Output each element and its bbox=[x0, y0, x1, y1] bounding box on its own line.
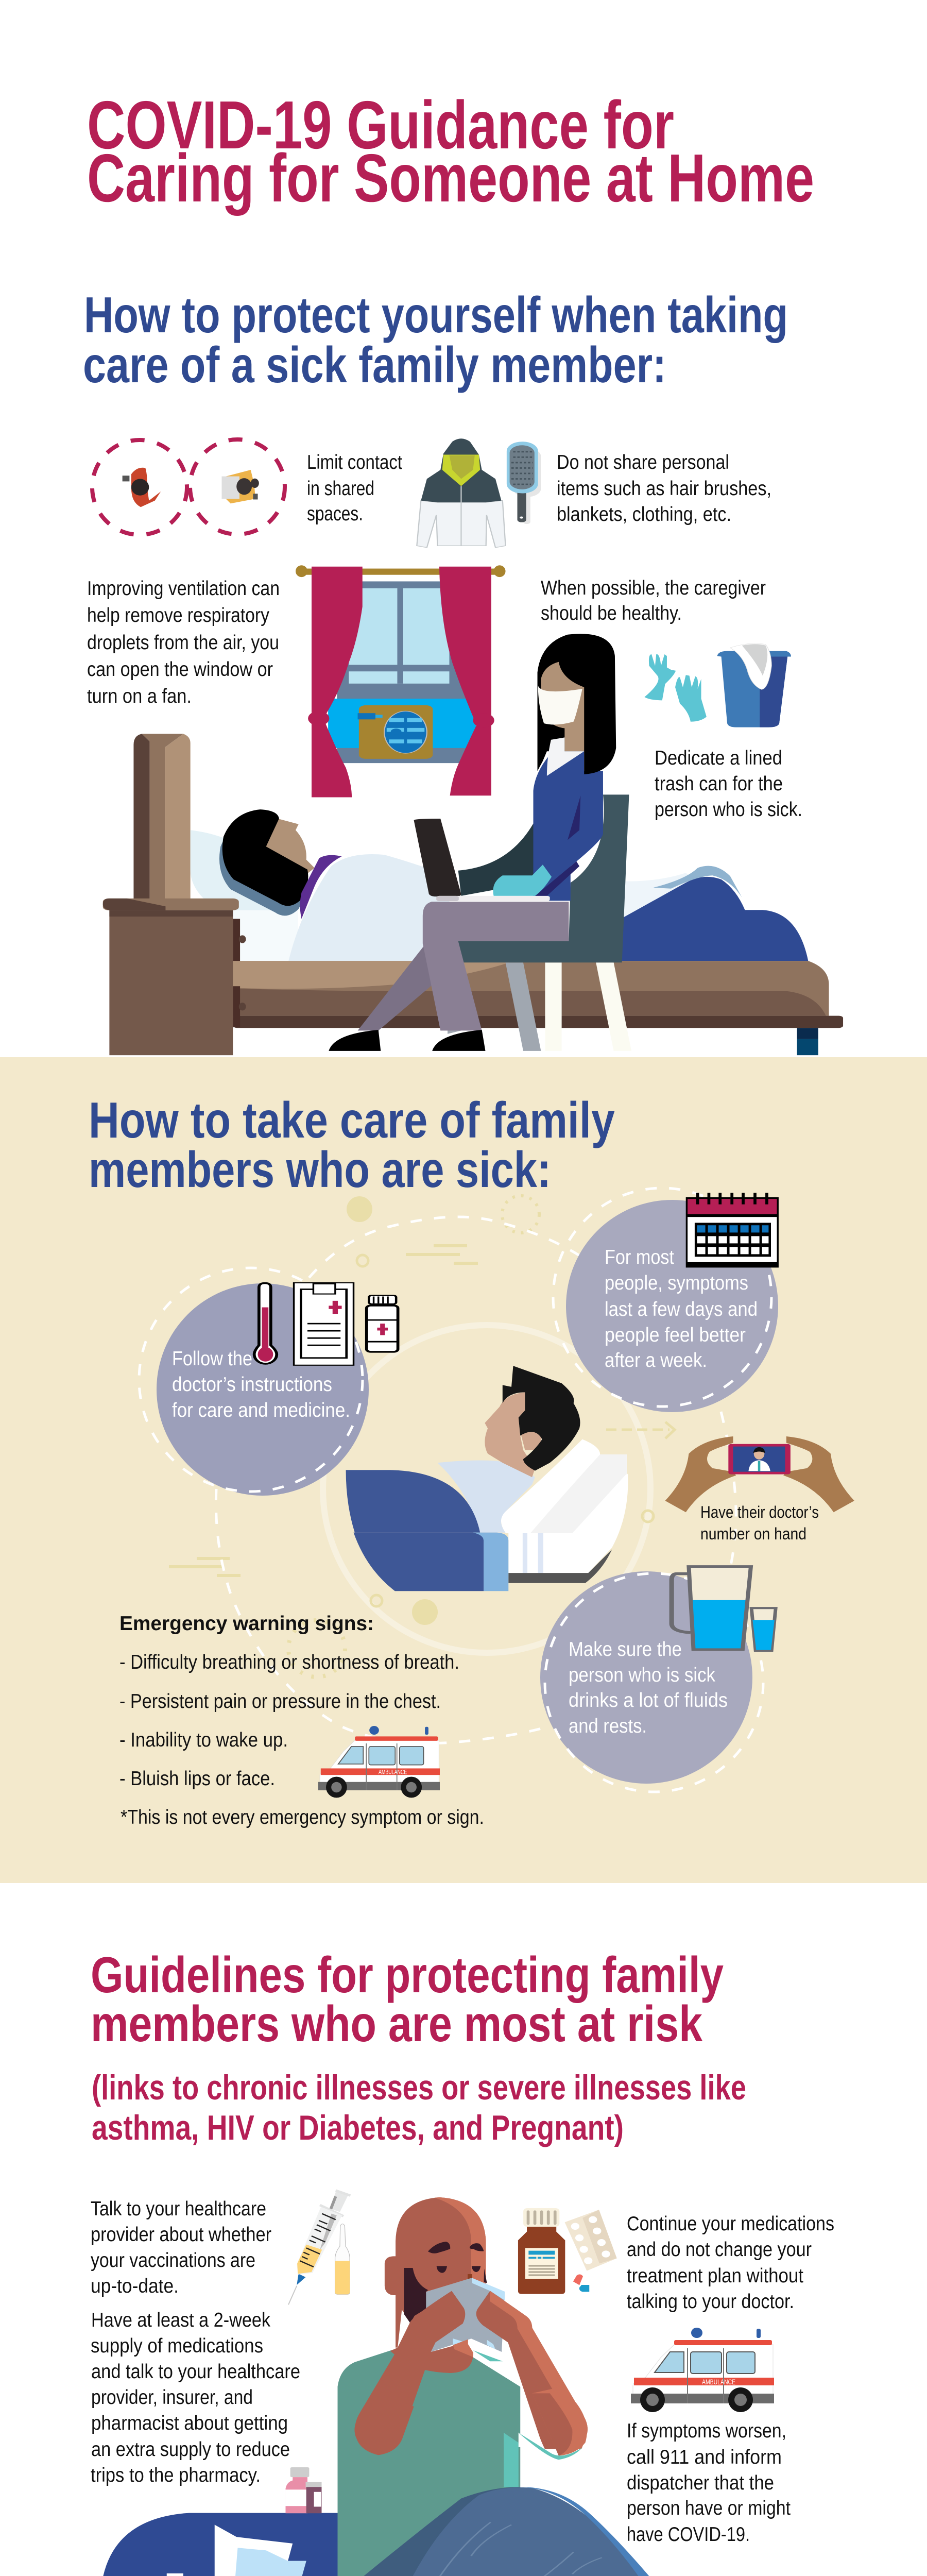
text: dedicate trash can: Dedicate a lined bbox=[655, 747, 782, 769]
text: emergency warning signs: - Difficulty breathing or shortness of breath. bbox=[119, 1651, 459, 1673]
panel: take care of family bbox=[0, 1057, 927, 1883]
text: talk to healthcare provider: up-to-date. bbox=[91, 2275, 179, 2297]
text: improving ventilation: can open the window or bbox=[87, 658, 273, 681]
subheading: chronic illnesses: (links to chronic illnesses or severe illnesses like bbox=[92, 2068, 746, 2107]
text: dedicate trash can bbox=[655, 747, 802, 821]
text: talk to healthcare provider: your vaccinations are bbox=[91, 2249, 255, 2272]
text: talk to healthcare provider: Talk to your healthcare bbox=[91, 2198, 266, 2220]
text: follow the doctor's instructions: doctor’s instructions bbox=[172, 1374, 332, 1396]
illustration: sick man resting in bed bbox=[346, 1366, 628, 1591]
text: make sure: person who is sick bbox=[569, 1664, 715, 1686]
text: 2-week supply: and talk to your healthcare bbox=[91, 2361, 300, 2383]
text: if symptoms worsen: person have or might bbox=[627, 2497, 791, 2519]
text: talk to healthcare provider: provider about whether bbox=[91, 2224, 271, 2246]
heading: take care: members who are sick: bbox=[89, 1141, 551, 1198]
heading: guidelines at risk bbox=[91, 1946, 724, 2052]
icon: lined trash can bbox=[717, 643, 791, 727]
callout: symptoms last a few days bbox=[553, 1188, 778, 1412]
icon: test tube bbox=[167, 2573, 183, 2576]
text: emergency warning signs bbox=[119, 1613, 484, 1828]
text: 2-week supply: Have at least a 2-week bbox=[91, 2309, 270, 2331]
illustration: man blowing nose bbox=[100, 2197, 729, 2576]
text: 2-week supply: supply of medications bbox=[91, 2335, 263, 2357]
text: continue medications: and do not change your bbox=[627, 2239, 812, 2261]
icon: ambulance: AMBULANCE bbox=[379, 1768, 407, 1775]
text: do not share: blankets, clothing, etc. bbox=[557, 503, 731, 526]
text: limit contact: spaces. bbox=[307, 503, 363, 525]
text: caregiver healthy: When possible, the caregiver bbox=[541, 577, 766, 599]
heading: take care bbox=[89, 1092, 615, 1198]
heading: protect yourself: care of a sick family member: bbox=[83, 336, 666, 393]
heading: take care: How to take care of family bbox=[89, 1092, 615, 1148]
text: emergency warning signs: - Bluish lips or face. bbox=[119, 1768, 275, 1790]
icon: gloves bbox=[644, 654, 707, 722]
icon: phone held in hands bbox=[665, 1436, 854, 1512]
text: continue medications: Continue your medications bbox=[627, 2213, 834, 2235]
text: follow the doctor's instructions: for care and medicine. bbox=[172, 1399, 350, 1421]
text: emergency warning signs: *This is not every emergency symptom or sign. bbox=[121, 1806, 484, 1828]
text: make sure: and rests. bbox=[569, 1715, 647, 1737]
text: limit contact: in shared bbox=[307, 478, 374, 500]
text: 2-week supply: trips to the pharmacy. bbox=[91, 2464, 261, 2486]
illustration: patient in bed bbox=[133, 734, 843, 1055]
icon: ambulance bbox=[318, 1726, 440, 1798]
text: improving ventilation: help remove respiratory bbox=[87, 604, 269, 626]
heading: guidelines at risk: Guidelines for protecting family bbox=[91, 1946, 724, 2003]
icon: tissue box bbox=[209, 2525, 311, 2576]
text: improving ventilation: droplets from the air, you bbox=[87, 632, 279, 654]
title: COVID-19 Guidance for bbox=[87, 87, 674, 163]
dashed connecting path bbox=[216, 1217, 736, 1743]
text: doctor's number bbox=[700, 1503, 819, 1543]
text: dedicate trash can: person who is sick. bbox=[655, 799, 802, 821]
subheading: chronic illnesses: asthma, HIV or Diabetes, and Pregnant) bbox=[92, 2108, 624, 2147]
text: do not share: Do not share personal bbox=[557, 451, 729, 473]
text: make sure: drinks a lot of fluids bbox=[569, 1689, 728, 1711]
text: if symptoms worsen bbox=[627, 2420, 791, 2546]
text: 2-week supply: pharmacist about getting bbox=[91, 2412, 288, 2434]
icon: calendar bbox=[686, 1193, 779, 1267]
text: emergency warning signs: - Inability to wake up. bbox=[119, 1729, 288, 1751]
decorative background ring and shapes bbox=[169, 1196, 675, 1677]
text: for most people: people feel better bbox=[605, 1324, 746, 1346]
subheading: chronic illnesses bbox=[92, 2068, 746, 2147]
text: caregiver healthy: should be healthy. bbox=[541, 602, 682, 624]
text: follow the doctor's instructions: Follow the bbox=[172, 1348, 252, 1370]
icon: two people distanced in dashed circles bbox=[92, 439, 285, 535]
text: do not share: items such as hair brushes, bbox=[557, 478, 771, 500]
text: caregiver healthy bbox=[541, 577, 766, 624]
text: for most people: For most bbox=[605, 1246, 674, 1268]
icon: ambulance large: AMBULANCE bbox=[702, 2378, 735, 2386]
icon: ambulance large bbox=[631, 2328, 774, 2412]
text: continue medications bbox=[627, 2213, 834, 2313]
icon: pill bottles on chair bbox=[285, 2467, 322, 2513]
text: make sure bbox=[569, 1638, 728, 1737]
text: improving ventilation bbox=[87, 578, 280, 707]
title bbox=[87, 87, 814, 216]
text: limit contact bbox=[307, 451, 402, 525]
illustration: caregiver on chair with laptop bbox=[329, 634, 631, 1051]
text: talk to healthcare provider bbox=[91, 2198, 271, 2297]
text: if symptoms worsen: dispatcher that the bbox=[627, 2472, 774, 2494]
text: emergency warning signs: Emergency warning signs: bbox=[119, 1613, 374, 1635]
text: continue medications: talking to your doctor. bbox=[627, 2291, 794, 2313]
heading: guidelines at risk: members who are most at risk bbox=[91, 1995, 702, 2052]
icon: jacket bbox=[417, 438, 506, 548]
text: improving ventilation: turn on a fan. bbox=[87, 685, 192, 707]
illustration: dresser bbox=[103, 899, 246, 1055]
text: make sure: Make sure the bbox=[569, 1638, 682, 1660]
heading: protect yourself bbox=[83, 286, 788, 393]
text: for most people: people, symptoms bbox=[605, 1272, 748, 1294]
callout: fluids and rest bbox=[540, 1571, 763, 1792]
text: doctor's number: number on hand bbox=[700, 1524, 806, 1543]
callout: follow instructions bbox=[139, 1268, 369, 1496]
text: 2-week supply: provider, insurer, and bbox=[91, 2386, 253, 2409]
icon: syringe and ampoule bbox=[288, 2190, 350, 2304]
text: for most people: last a few days and bbox=[605, 1298, 758, 1320]
text: follow the doctor's instructions bbox=[172, 1348, 350, 1421]
text: 2-week supply: an extra supply to reduce bbox=[91, 2438, 290, 2461]
text: 2-week supply bbox=[91, 2309, 300, 2486]
text: for most people bbox=[605, 1246, 758, 1371]
text: for most people: after a week. bbox=[605, 1349, 707, 1371]
text: dedicate trash can: trash can for the bbox=[655, 773, 783, 795]
icon: medicine bottle and blister pack bbox=[518, 2208, 617, 2294]
text: continue medications: treatment plan without bbox=[627, 2265, 803, 2287]
text: emergency warning signs: - Persistent pain or pressure in the chest. bbox=[119, 1690, 441, 1713]
text: if symptoms worsen: call 911 and inform bbox=[627, 2446, 782, 2468]
text: improving ventilation: Improving ventilation can bbox=[87, 578, 280, 600]
text: do not share bbox=[557, 451, 771, 526]
text: if symptoms worsen: have COVID-19. bbox=[627, 2523, 750, 2546]
icon: hair brush bbox=[507, 442, 541, 524]
text: if symptoms worsen: If symptoms worsen, bbox=[627, 2420, 786, 2442]
text: doctor's number: Have their doctor’s bbox=[700, 1503, 819, 1521]
icon: thermometer, clipboard and medicine bbox=[254, 1283, 398, 1365]
text: limit contact: Limit contact bbox=[307, 451, 402, 473]
illustration: window with curtains and fan bbox=[296, 565, 506, 797]
icon: jug and glass of water bbox=[672, 1567, 776, 1651]
